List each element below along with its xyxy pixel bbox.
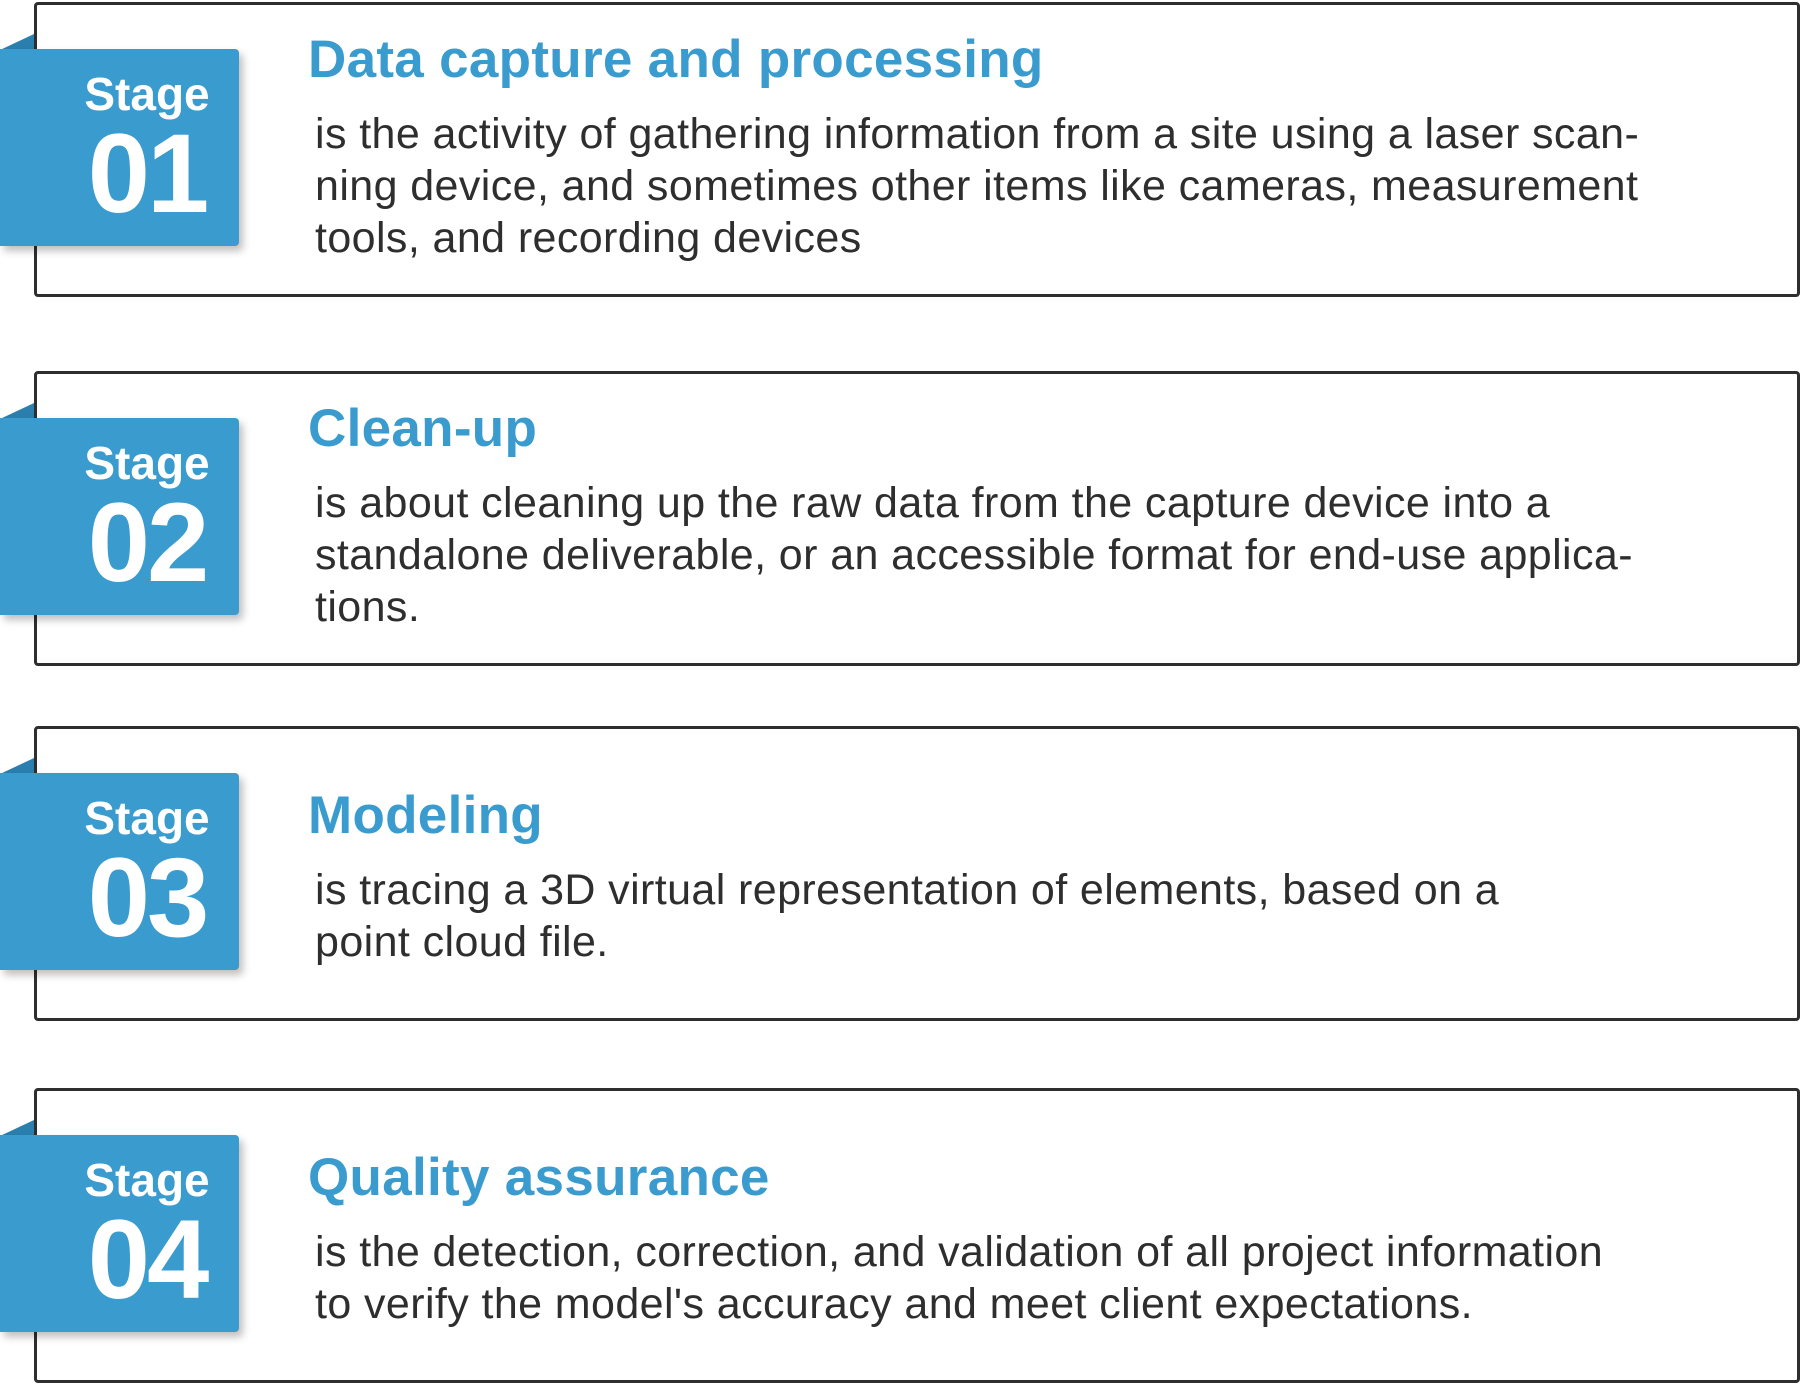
text: modeling description: point cloud file. <box>315 918 609 966</box>
badge: stage 01: Stage <box>84 68 210 120</box>
text: data capture description: tools, and recording devices <box>315 214 862 262</box>
panel: stage 03 <box>34 726 1800 1021</box>
badge: stage 02 <box>0 403 247 624</box>
text: quality assurance description: is the detection, correction, and validation of all project information <box>315 1228 1603 1276</box>
title: clean-up: Clean-up <box>308 399 537 458</box>
badge: stage 04 <box>0 1120 247 1341</box>
badge: stage 03: Stage <box>84 792 210 844</box>
badge: stage 03 <box>0 758 247 979</box>
badge: stage 02: 02 <box>88 480 206 605</box>
title: quality assurance: Quality assurance <box>308 1148 770 1207</box>
title: data capture: Data capture and processing <box>308 30 1044 89</box>
text: modeling description: is tracing a 3D virtual representation of elements, based on a <box>315 866 1499 914</box>
panel: stage 02 <box>34 371 1800 666</box>
text: clean-up description: standalone deliverable, or an accessible format for end-use applica- <box>315 531 1633 579</box>
panel: stage 04 <box>34 1088 1800 1383</box>
text: data capture description <box>315 110 1639 262</box>
title: modeling: Modeling <box>308 786 543 845</box>
text: modeling description <box>315 866 1499 966</box>
badge: stage 04: 04 <box>88 1197 206 1322</box>
text: data capture description: ning device, and sometimes other items like cameras, measurement <box>315 162 1638 210</box>
text: quality assurance description <box>315 1228 1603 1328</box>
text: clean-up description: is about cleaning up the raw data from the capture device into a <box>315 479 1550 527</box>
badge: stage 01 <box>0 34 247 255</box>
text: quality assurance description: to verify the model's accuracy and meet client expectations. <box>315 1280 1473 1328</box>
badge: stage 04: Stage <box>84 1154 210 1206</box>
text: data capture description: is the activity of gathering information from a site using a laser scan- <box>315 110 1639 158</box>
panel: stage 01 <box>34 2 1800 297</box>
badge: stage 02: Stage <box>84 437 210 489</box>
badge: stage 03: 03 <box>88 835 206 960</box>
text: clean-up description: tions. <box>315 583 420 631</box>
text: clean-up description <box>315 479 1633 631</box>
badge: stage 01: 01 <box>88 111 206 236</box>
